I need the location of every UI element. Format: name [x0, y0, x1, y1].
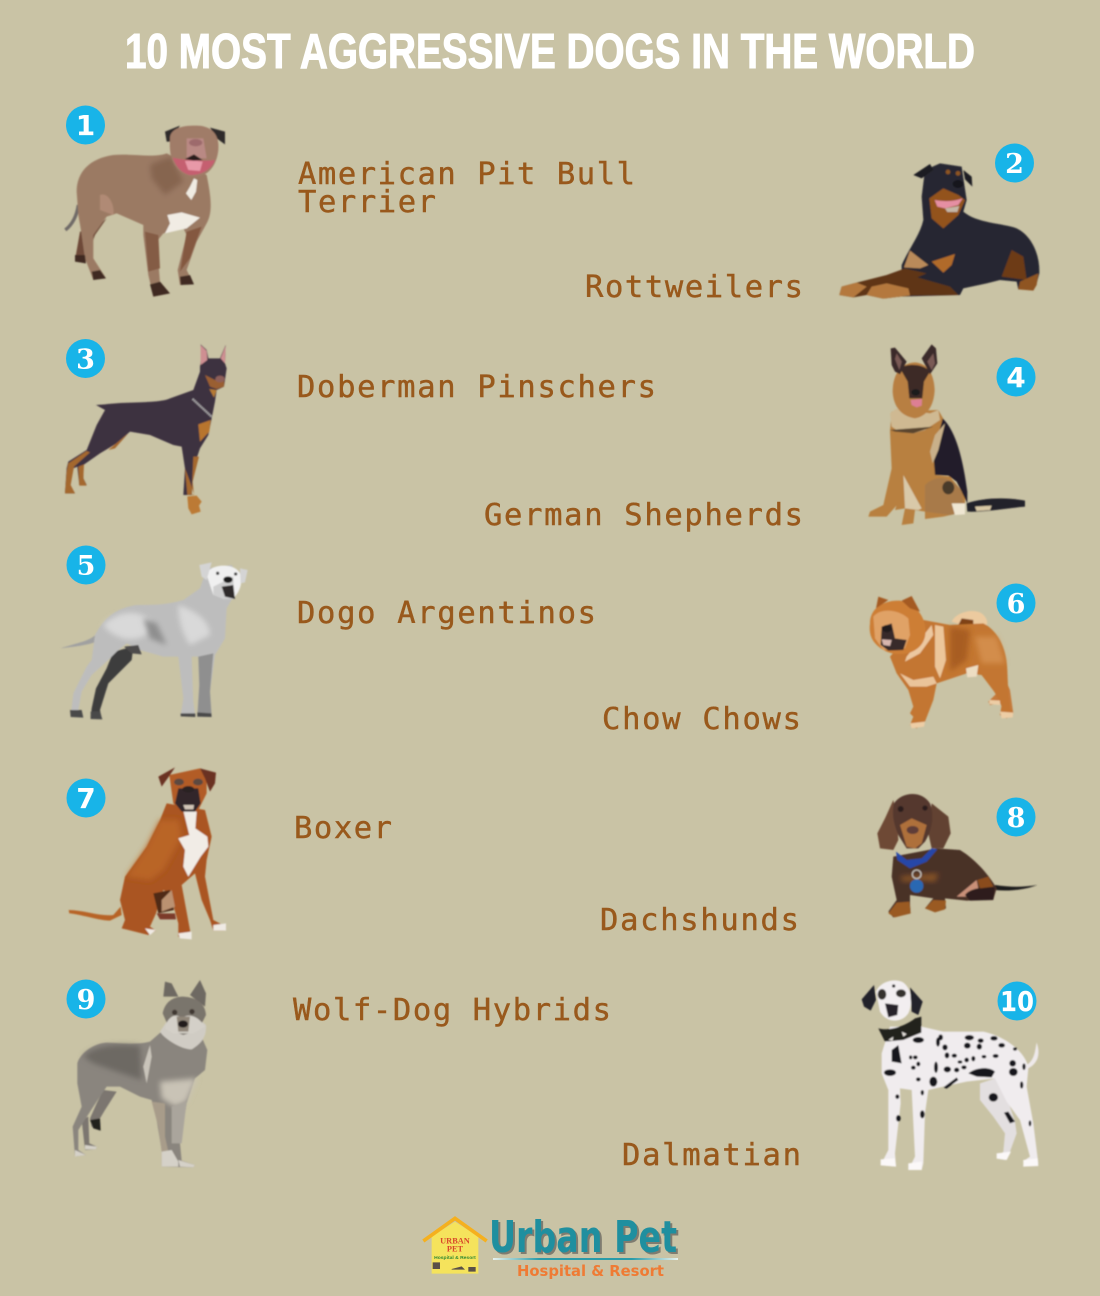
label: Dogo Argentinos: Dogo Argentinos	[297, 596, 596, 631]
badge 1	[66, 106, 105, 144]
label: German Shepherds: German Shepherds	[484, 498, 803, 533]
badge 7	[66, 778, 106, 818]
label: American Pit Bull Terrier	[298, 157, 635, 220]
label: Boxer: Boxer	[294, 811, 392, 846]
label: Doberman Pinschers: Doberman Pinschers	[297, 370, 656, 405]
dog 3: Doberman Pinscher	[65, 344, 227, 514]
badge 9	[66, 980, 106, 1018]
dog 9: Wolf-dog hybrid	[73, 980, 207, 1167]
logo wordmark: Urban Pet	[489, 1212, 677, 1263]
dog 10: Dalmatian	[862, 980, 1039, 1170]
logo underline	[493, 1258, 678, 1260]
dog 2: Rottweiler	[839, 163, 1039, 299]
logo tagline: Hospital & Resort	[517, 1262, 664, 1280]
badge 8	[996, 798, 1036, 836]
dog 1: American Pit Bull Terrier	[65, 126, 225, 297]
logo house icon: Hospital & Resort	[434, 1255, 476, 1261]
logo wordmark shadow: Urban Pet	[491, 1214, 679, 1265]
dog 7: Boxer	[69, 767, 226, 939]
badge 1: 1	[76, 109, 95, 142]
badge 3: 3	[76, 344, 95, 376]
badge 2: 2	[1005, 149, 1024, 180]
dog 4: German Shepherd	[868, 344, 1025, 525]
badge 10: 10	[1000, 985, 1034, 1018]
badge 6	[996, 584, 1036, 622]
dog 5: Dogo Argentino	[61, 562, 248, 719]
label: American Pit Bull Terrier: Terrier	[298, 185, 436, 220]
badge 7: 7	[76, 782, 96, 815]
badge 2	[995, 144, 1034, 182]
badge 5: 5	[77, 551, 95, 582]
badge 4	[996, 358, 1036, 396]
badge 4: 4	[1006, 361, 1026, 394]
dog 6: Chow Chow	[870, 596, 1013, 728]
label: Rottweilers: Rottweilers	[585, 270, 803, 305]
label: Chow Chows: Chow Chows	[602, 702, 801, 737]
badge 3	[66, 339, 105, 378]
badge 5	[66, 546, 106, 584]
logo: Urban Pet Hospital & Resort	[423, 1212, 679, 1280]
dog 8: Dachshund	[877, 794, 1037, 917]
label: Dachshunds: Dachshunds	[600, 903, 799, 938]
badge 6: 6	[1007, 589, 1025, 620]
label: Wolf-Dog Hybrids: Wolf-Dog Hybrids	[293, 993, 611, 1028]
badge 8: 8	[1007, 803, 1025, 834]
label: American Pit Bull Terrier: American Pit Bull	[298, 157, 635, 192]
label: Dalmatian: Dalmatian	[622, 1138, 801, 1173]
logo house icon	[423, 1218, 487, 1274]
logo house icon: URBAN	[440, 1237, 470, 1246]
badge 9: 9	[77, 985, 95, 1016]
logo house icon: PET	[447, 1244, 464, 1253]
